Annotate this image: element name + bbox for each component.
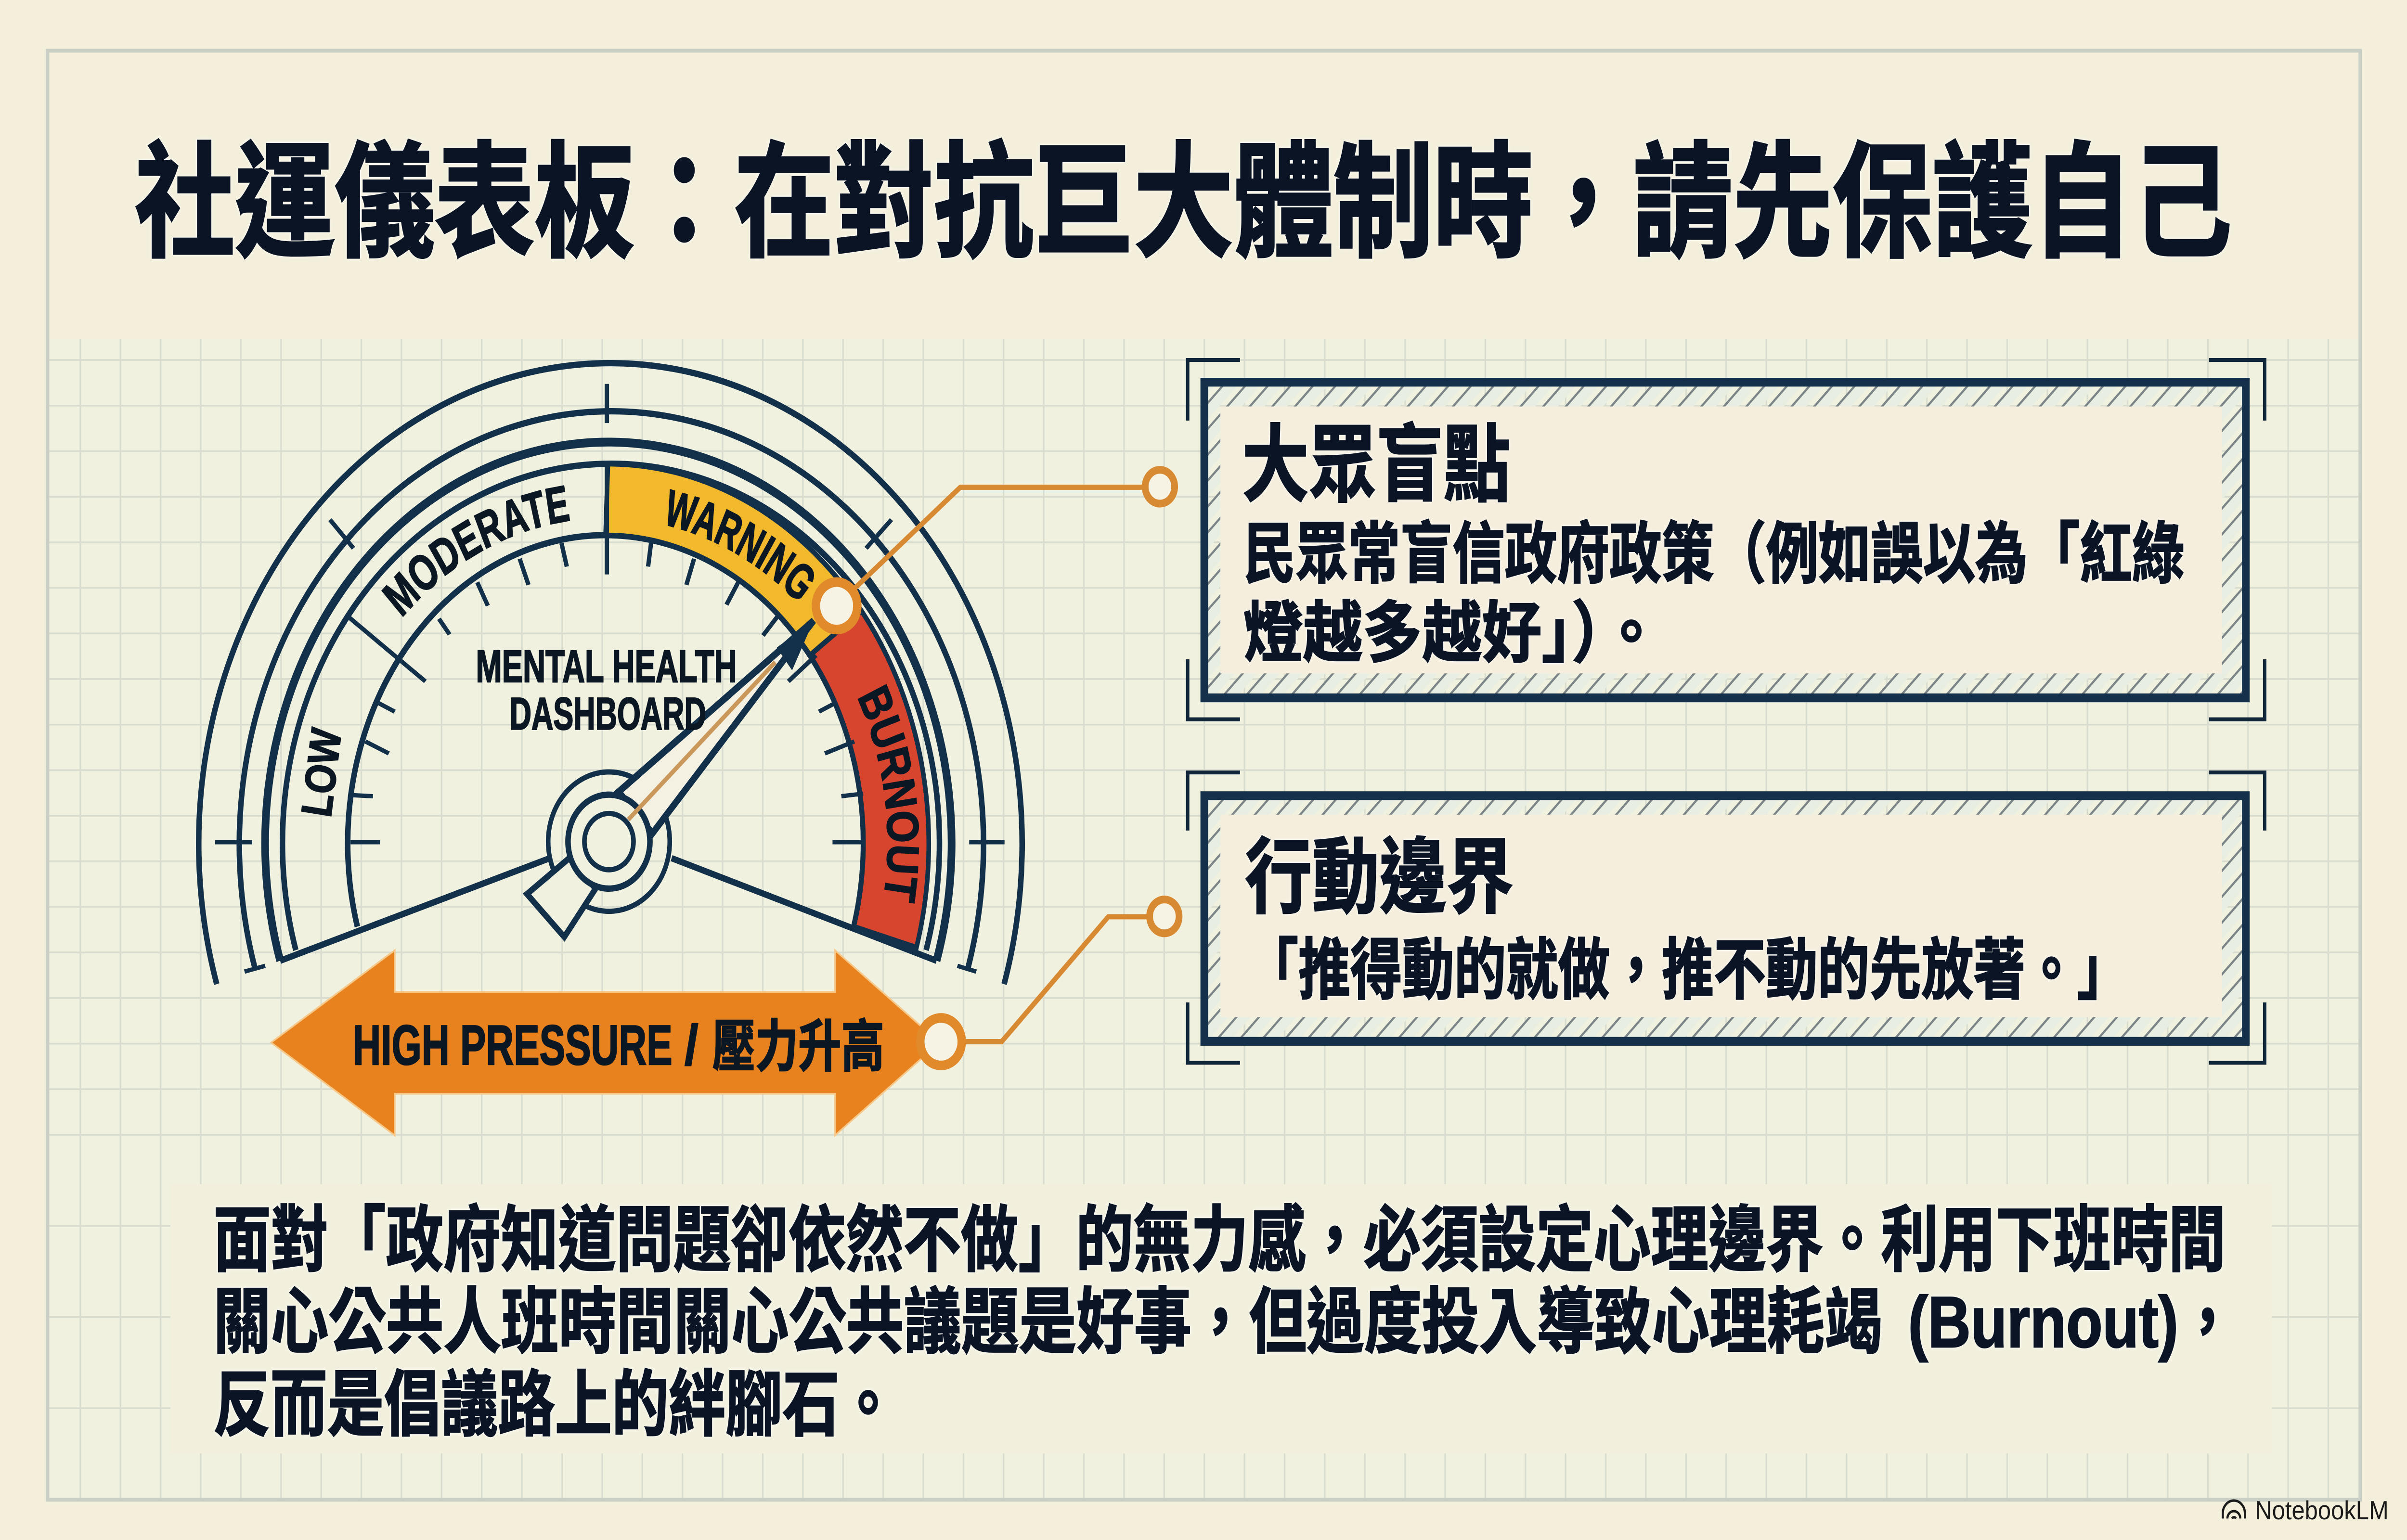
needle tail [527,858,595,937]
hub middle ring [568,795,650,888]
connector: warning to blind spot box [816,470,1175,629]
needle [619,621,814,834]
gauge centre label: DASHBOARD [510,688,706,739]
connector: pressure to boundary box [920,899,1179,1065]
heading: 大眾盲點 [1242,418,1511,513]
zone label MODERATE: MODERATE [381,485,570,617]
bottom paragraph: 反而是倡議路上的絆腳石。 [213,1364,896,1445]
zone label BURNOUT: BURNOUT [858,684,919,904]
bottom paragraph: 關心公共人班時間關心公共議題是好事，但過度投入導致心理耗竭 [213,1282,1882,1362]
corner brackets [1188,360,2265,719]
bottom paragraph: (Burnout) [1908,1282,2178,1362]
pressure arrow [271,950,940,1135]
box frame with hatching [1204,796,2246,1041]
hub outer ring [548,772,670,911]
heading: 行動邊界 [1245,832,1514,924]
body text: 燈越多越好」）。 [1243,596,1661,671]
needle orange line [628,662,775,820]
gauge outer arcs [199,363,1022,984]
title: 社運儀表板：在對抗巨大體制時，請先保護自己 [135,133,2232,273]
grid background panel [48,339,2359,1500]
arrow label: / [685,1014,699,1077]
bottom paragraph: 面對「政府知道問題卻依然不做」的無力感，必須設定心理邊界。利用下班時間 [213,1200,2226,1281]
gauge centre label [476,640,737,739]
gauge centre label: MENTAL HEALTH [476,640,737,692]
zone label LOW: LOW [293,725,350,820]
burnout band [810,611,929,948]
gauge [196,360,1042,1003]
arrow label: 壓力升高 [712,1016,884,1078]
panel: blind spot [1188,360,2265,719]
hub inner ring [584,813,634,870]
body text [1243,517,2185,671]
NotebookLM watermark: NotebookLM [2255,1495,2389,1525]
warning band [606,464,862,655]
body text: 民眾常盲信政府政策（例如誤以為「紅綠 [1243,517,2185,591]
quote: 「推得動的就做，推不動的先放著。」 [1246,933,2129,1008]
bottom paragraph [213,1200,2235,1445]
zone label WARNING: WARNING [668,489,815,599]
gauge wedge lines [280,858,936,961]
corner brackets [1188,772,2265,1063]
box frame with hatching [1204,382,2246,698]
gauge ticks [215,384,1005,972]
icon: NotebookLM arcs [2223,1501,2245,1518]
panel: action boundary [1188,772,2265,1063]
arrow label: HIGH PRESSURE [353,1014,673,1077]
bottom paragraph: ， [2180,1282,2235,1362]
